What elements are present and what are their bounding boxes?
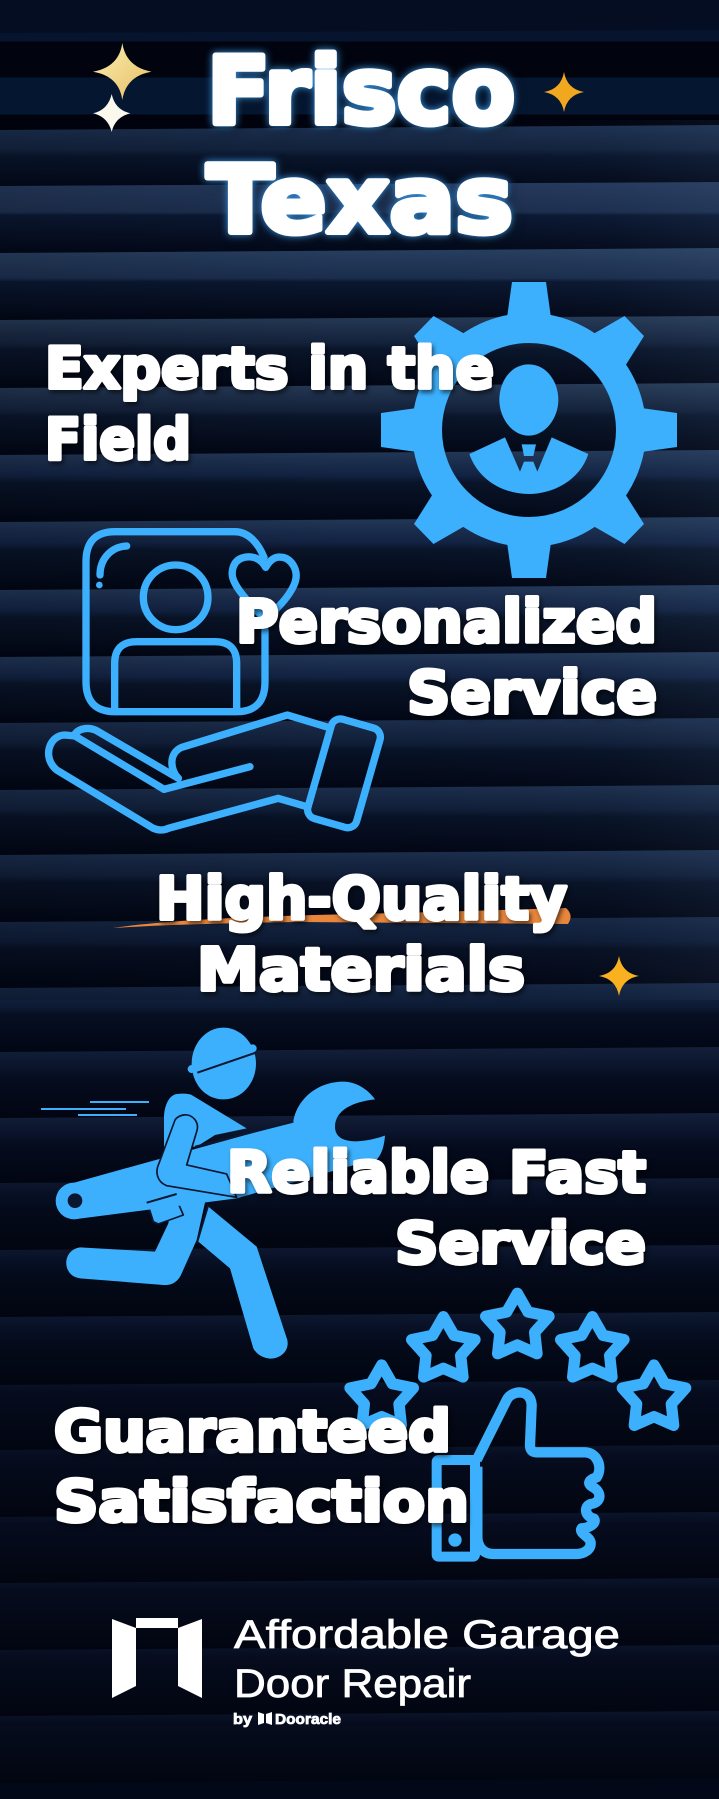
- title: Texas: [207, 146, 513, 254]
- icon: hand holding profile card: [49, 532, 383, 830]
- icon: orange sparkle beside title: [544, 72, 584, 112]
- heading: personalized service: [236, 587, 657, 727]
- heading: high-quality materials: Materials: [197, 935, 525, 1004]
- logo: company name: Door Repair: [234, 1662, 471, 1706]
- logo: door mark: [112, 1618, 202, 1698]
- feature labels: [45, 336, 657, 1535]
- heading: high-quality materials: High-Quality: [156, 864, 567, 933]
- heading: reliable fast service: Service: [395, 1211, 646, 1277]
- logo: by Dooracle: Dooracle: [275, 1711, 341, 1728]
- heading: high-quality materials: [156, 864, 567, 1004]
- logo: by Dooracle: by: [233, 1711, 253, 1728]
- title: [207, 37, 515, 254]
- heading: experts in the field: Field: [45, 407, 191, 473]
- logo: company name: Affordable Garage: [234, 1613, 620, 1657]
- heading: guaranteed satisfaction: [54, 1399, 469, 1535]
- heading: guaranteed satisfaction: Guaranteed: [54, 1399, 451, 1465]
- icon: gear with businessman: [381, 282, 677, 578]
- icon: running worker with wrench: [41, 1028, 385, 1359]
- heading: experts in the field: Experts in the: [45, 336, 494, 402]
- icon: sparkle beside materials: [599, 956, 639, 996]
- heading: personalized service: Service: [407, 658, 657, 727]
- icon: orange brush stroke: [113, 908, 571, 928]
- logo: by Dooracle: [233, 1711, 341, 1728]
- icon: gold sparkle, large: [93, 43, 152, 100]
- heading: personalized service: Personalized: [236, 587, 657, 656]
- heading: guaranteed satisfaction: Satisfaction: [54, 1469, 469, 1535]
- heading: reliable fast service: [227, 1140, 646, 1277]
- heading: reliable fast service: Reliable Fast: [227, 1140, 646, 1206]
- icon: white sparkle: [93, 94, 130, 132]
- heading: experts in the field: [45, 336, 494, 473]
- title: Frisco: [207, 37, 515, 145]
- logo: company name: [234, 1613, 620, 1706]
- icon: five stars and thumbs up: [350, 1293, 686, 1557]
